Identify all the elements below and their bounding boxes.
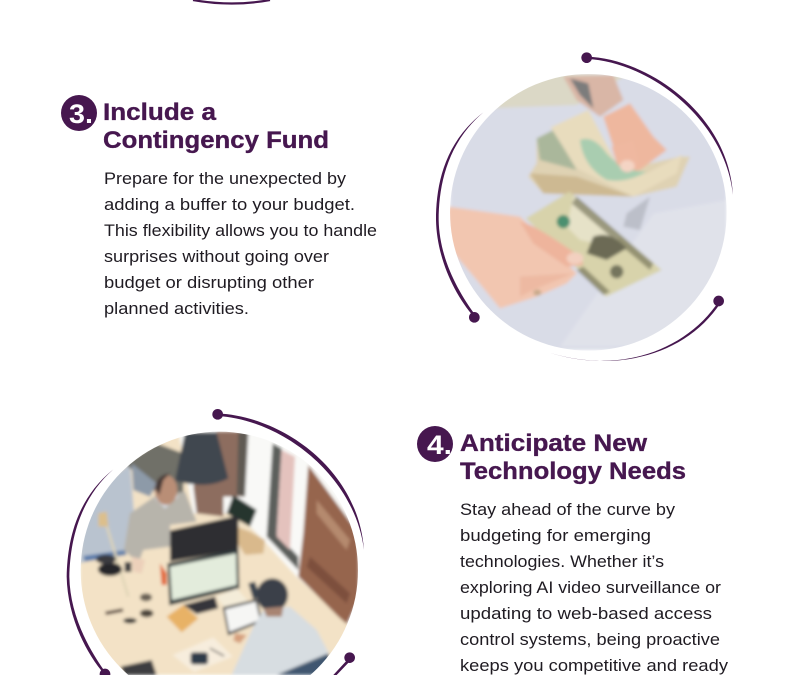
body text section 4: keeps you competitive and ready [460,657,729,675]
laptop [223,599,262,635]
body text section 3: planned activities. [104,300,249,318]
desk lamp [105,526,128,596]
thumb [520,222,583,267]
body text section 3: This flexibility allows you to handle [104,222,377,240]
arc accents [67,409,364,675]
heading: Anticipate New Technology Needs: Anticipate New [460,430,648,457]
monitors [170,516,238,562]
photo: two people working at computers in office [67,409,364,675]
section 3: heading and text [61,95,377,318]
body text section 4: technologies. Whether it’s [460,553,664,571]
body text section 4: budgeting for emerging [460,527,651,545]
chair and crate [227,495,257,527]
back wall and window [178,432,359,633]
heading: Include a Contingency Fund: Contingency Fund [103,127,329,154]
table [342,618,347,625]
body text section 3: Prepare for the unexpected by [104,170,347,188]
person one [124,492,197,563]
section 4: heading and text [417,426,729,675]
body text section 4: Stay ahead of the curve by [460,501,676,519]
lower hand [448,207,577,308]
photo: hands counting dollar bills [436,52,733,361]
top bill [551,110,682,197]
bill stack [528,142,690,196]
blurred upper wrist [563,75,623,117]
sofa [125,443,183,493]
decorative arc from previous section [193,0,270,4]
notebook and pouch [173,637,233,672]
desk objects [167,605,198,632]
heading: Anticipate New Technology Needs [460,430,686,485]
heading: Anticipate New Technology Needs: Technology Needs [460,458,686,485]
body text section 4: control systems, being proactive [460,631,720,649]
body text section 3: budget or disrupting other [104,274,315,292]
pendant lamp [175,432,228,485]
headset and phone [98,563,122,576]
body text section 4: updating to web-based access [460,605,712,623]
body text section 3: surprises without going over [104,248,330,266]
dark laptop bottom [121,660,157,675]
body text section 3: adding a buffer to your budget. [104,196,355,214]
upper hand [603,103,667,172]
number badge 3: 3. [69,99,93,129]
brick wall [298,465,359,625]
heading: Include a Contingency Fund [103,99,329,154]
floor left [80,463,137,563]
person two [232,607,329,675]
body text section 3 [104,170,377,318]
front dollar bill [526,192,662,297]
arc accents [436,52,733,361]
body text section 4: exploring AI video surveillance or [460,579,722,597]
number badge 3 [61,95,97,131]
body text section 4 [460,501,729,675]
number badge 4: 4. [427,430,452,460]
number badge 4 [417,426,453,462]
heading: Include a Contingency Fund: Include a [103,99,216,126]
